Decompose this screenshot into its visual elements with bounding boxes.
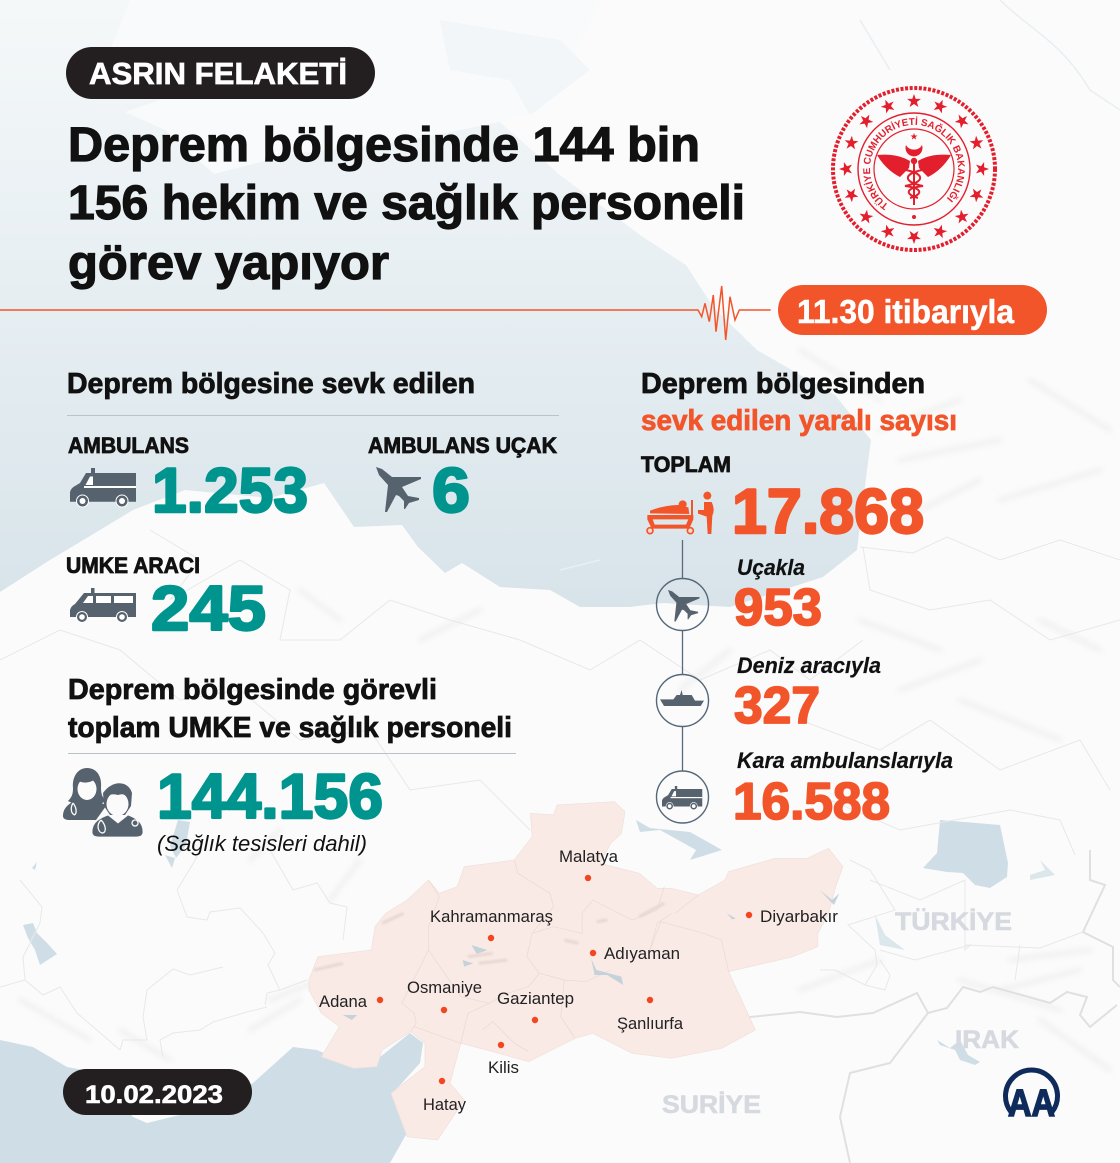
city markers and names: Kilis	[488, 1058, 519, 1077]
timeline connector	[682, 540, 684, 771]
icon: ambulance in circle	[656, 771, 708, 823]
tag: ASRIN FELAKETİ: ASRIN FELAKETİ	[89, 56, 347, 91]
city markers and names: Adana	[319, 992, 368, 1011]
city markers and names: Adıyaman	[604, 944, 680, 963]
title	[68, 119, 745, 290]
icon: doctors	[63, 768, 143, 837]
stat: deniz aracıyla: Deniz aracıyla	[737, 653, 881, 678]
icon: ship in circle	[656, 674, 708, 726]
stat: personnel	[63, 762, 383, 856]
city markers and names: Hatay	[423, 1095, 466, 1114]
stat: umke aracı	[66, 553, 266, 644]
right heading: Deprem bölgesinden	[641, 368, 925, 400]
icon: plane in circle	[656, 578, 708, 630]
stat: umke aracı: 245	[151, 574, 266, 644]
staff heading: Deprem bölgesinde görevli	[68, 674, 437, 706]
logo: Anadolu Agency: AA	[1008, 1083, 1055, 1125]
stat: kara ambulanslarıyla: Kara ambulanslarıyla	[737, 748, 953, 773]
logo: Anadolu Agency	[1006, 1070, 1058, 1125]
seismic divider line	[0, 286, 771, 340]
stat: ambulans	[68, 433, 308, 526]
city markers and names: Gaziantep	[497, 989, 574, 1008]
stat: kara ambulanslarıyla: 16.588	[733, 773, 890, 831]
stat: uçakla: Uçakla	[737, 555, 805, 580]
date badge: 10.02.2023	[85, 1081, 223, 1109]
stat: ambulans: 1.253	[152, 456, 308, 526]
title: 156 hekim ve sağlık personeli	[68, 177, 745, 230]
stat: kara ambulanslarıyla	[656, 748, 953, 831]
city markers and names: Şanlıurfa	[617, 1014, 684, 1033]
stat: toplam: 17.868	[732, 477, 924, 547]
stat: ambulans: AMBULANS	[68, 433, 189, 458]
stat: personnel: 144.156	[157, 762, 383, 832]
stat: uçakla: 953	[734, 579, 822, 637]
ministry of health seal: TÜRKİYE CUMHURİYETİ SAĞLIK BAKANLIĞI	[863, 116, 965, 210]
date badge	[63, 1069, 252, 1115]
icon: plane	[376, 467, 421, 512]
icon: stretcher and carer	[647, 492, 714, 534]
stat: deniz aracıyla	[656, 653, 881, 735]
map: affected provinces region	[309, 802, 843, 1140]
stat: toplam: TOPLAM	[641, 452, 731, 477]
left heading: Deprem bölgesine sevk edilen	[67, 368, 475, 400]
stat: ambulans uçak: AMBULANS UÇAK	[368, 433, 557, 458]
ministry of health seal	[831, 86, 997, 252]
city markers and names	[319, 847, 838, 1114]
stat: personnel: (Sağlık tesisleri dahil)	[157, 831, 367, 856]
borders	[0, 530, 1120, 1163]
country label: IRAK: IRAK	[955, 1026, 1019, 1054]
time badge	[778, 285, 1047, 335]
stat: toplam	[641, 452, 924, 547]
right heading	[641, 368, 957, 437]
icon: umke vehicle	[70, 588, 136, 622]
city markers and names: Diyarbakır	[760, 907, 838, 926]
city markers and names: Osmaniye	[407, 978, 482, 997]
country label: TÜRKİYE: TÜRKİYE	[895, 907, 1012, 936]
icon: ambulance	[70, 468, 136, 507]
country label: SURİYE: SURİYE	[662, 1091, 761, 1119]
stat: deniz aracıyla: 327	[734, 677, 820, 735]
staff heading	[68, 674, 512, 744]
tag: ASRIN FELAKETİ	[66, 47, 375, 99]
stat: umke aracı: UMKE ARACI	[66, 553, 200, 578]
city markers and names: Kahramanmaraş	[430, 907, 553, 926]
title: Deprem bölgesinde 144 bin	[68, 119, 700, 172]
title: görev yapıyor	[68, 237, 389, 290]
stat: ambulans uçak: 6	[432, 456, 470, 526]
stat: ambulans uçak	[368, 433, 557, 526]
time badge: 11.30 itibarıyla	[797, 293, 1015, 330]
city markers and names: Malatya	[559, 847, 619, 866]
stat: uçakla	[656, 555, 822, 637]
staff heading: toplam UMKE ve sağlık personeli	[68, 712, 512, 744]
terrain shading	[20, 350, 1110, 1070]
right heading: sevk edilen yaralı sayısı	[641, 405, 957, 437]
